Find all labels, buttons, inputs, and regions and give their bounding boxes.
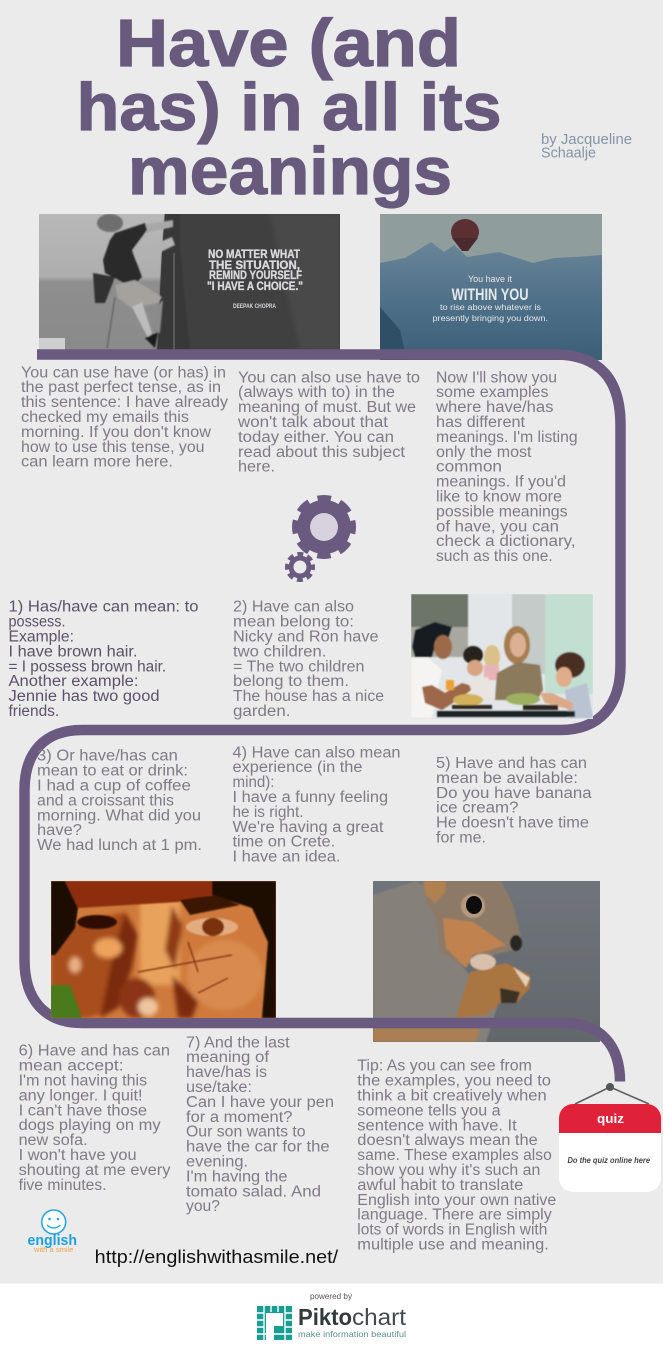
meaning 6: accept: five minutes. [19,1177,107,1194]
paragraph: must: won't talk about that [237,414,389,431]
meaning 5: be available: 5) Have and has can [436,755,587,772]
paragraph: must [237,369,420,476]
meaning 4: experience: I have a funny feeling [232,789,388,806]
meaning 7: use or take: 7) And the last [186,1034,290,1051]
paragraph: other meanings: meanings. I'm listing [436,429,578,446]
meaning 6: accept: any longer. I quit! [19,1087,143,1104]
paragraph: must: read about this subject [238,444,406,461]
quote text [432,274,548,323]
logo: english with a smile: with a smile [33,1247,74,1254]
paragraph: other meanings: Now I'll show you [436,369,557,386]
quote text [207,249,303,310]
meaning 7: use or take: have the car for the [186,1139,330,1156]
photo: family eating [411,594,593,719]
title: Have (and [116,6,461,81]
author byline: by Jacqueline [541,132,632,148]
meaning 6: accept: I'm not having this [19,1072,147,1090]
meaning 7: use or take: I'm having the [186,1168,288,1185]
paragraph: other meanings: some examples [436,384,549,401]
paragraph: other meanings: only the most [436,444,532,461]
meaning 5: be available: Do you have banana [436,785,592,802]
tip paragraph: someone tells you a [357,1102,501,1119]
photo: climber quote [38,213,340,350]
meaning 2: belong to: = The two children [233,658,364,675]
website url: http://englishwithasmile.net/ [95,1246,339,1267]
meaning 3: eat or drink: and a croissant this [37,792,174,809]
meaning 7: use or take: meaning of [186,1049,270,1066]
paragraph: past perfect: You can use have (or has) in [21,364,226,381]
meaning 3: eat or drink: mean to eat or drink: [37,763,188,780]
quote text: You have it [468,274,512,284]
left eye [77,915,117,929]
footer: powered by Piktochart: powered by [310,1292,352,1301]
paragraph: past perfect [21,364,228,471]
meaning 6: accept: dogs playing on my [19,1117,161,1134]
meaning 4: experience: experience (in the [232,759,362,776]
quote text: presently bringing you down. [432,313,548,323]
tip paragraph: the examples, you need to [357,1073,551,1090]
paragraph: other meanings: check a dictionary, [436,533,576,550]
paragraph: past perfect: can learn more here. [21,454,173,471]
meaning 6: accept: new sofa. [19,1132,88,1149]
climber figure [93,214,175,348]
meaning 2: belong to [233,599,384,720]
paragraph: other meanings: like to know more [436,488,562,506]
footer: powered by Piktochart: make information beautiful [298,1329,406,1339]
meaning 1: possess: 1) Has/have can mean: to [8,599,198,616]
title: meanings [128,134,452,209]
right eye [186,918,238,936]
logo: english with a smile: english [28,1232,77,1249]
quote text: "I HAVE A CHOICE." [207,281,303,293]
purple connector line [24,354,620,1082]
squirrel eye [466,896,482,914]
logo: english with a smile [28,1210,77,1254]
icon: gears [287,498,353,580]
squirrel photo [373,881,600,1042]
meaning 4: experience: We're having a great [232,819,384,836]
meaning 5: be available [436,755,592,846]
paragraph: other meanings: where have/has [435,399,554,416]
footer: powered by Piktochart [0,1284,663,1350]
tip paragraph [357,1058,556,1254]
tip paragraph: Tip: As you can see from [357,1058,532,1075]
paragraph: must: today either. You can [238,429,394,446]
paragraph: other meanings [435,369,578,565]
photo: face in shadow [51,881,276,1018]
quote text: THE SITUATION, [209,260,300,272]
meaning 1: possess: Example: [8,628,74,646]
meaning 4: experience: I have an idea. [232,849,340,866]
meaning 7: use or take: Can I have your pen [186,1094,334,1111]
meaning 7: use or take: evening. [186,1154,248,1170]
meaning 6: accept [19,1043,171,1194]
meaning 3: eat or drink: morning. What did you [37,807,201,824]
meaning 6: accept: 6) Have and has can [19,1043,170,1060]
tip paragraph: multiple use and meaning. [357,1236,549,1254]
tip paragraph: think a bit creatively when [357,1088,547,1104]
tip paragraph: lots of words in English with [357,1222,547,1239]
paragraph: past perfect: the past perfect tense, as in [21,379,221,396]
meaning 2: belong to: belong to them. [233,673,349,690]
paragraph: past perfect: morning. If you don't know [21,424,212,441]
meaning 2: belong to: garden. [233,703,290,720]
photo: balloon and mountains [380,214,602,360]
meaning 2: belong to: Nicky and Ron have [233,628,378,646]
paragraph: must: You can also use have to [238,369,420,386]
tip paragraph: language. There are simply [357,1207,552,1224]
paragraph: must: here. [238,459,275,476]
tip paragraph: show you why it's such an [357,1162,540,1179]
meaning 5: be available: for me. [436,830,486,846]
author byline [541,132,632,162]
meaning 4: experience: mind): [232,774,274,791]
paragraph: past perfect: this sentence: I have already [21,394,228,411]
meaning 3: eat or drink: have? [37,822,82,839]
meaning 7: use or take: for a moment? [186,1109,293,1126]
meaning 6: accept: I won't have you [19,1147,137,1164]
meaning 5: be available: He doesn't have time [436,815,589,832]
paragraph: other meanings: has different [436,414,526,431]
quiz hanging sign [559,1083,661,1192]
meaning 5: be available: ice cream? [436,800,519,817]
meaning 3: eat or drink: I had a cup of coffee [37,778,191,794]
meaning 7: use or take [186,1034,334,1215]
title: has) in all its [76,70,502,145]
quote text: NO MATTER WHAT [208,249,300,261]
title [76,6,502,209]
meaning 1: possess: I have brown hair. [8,643,138,660]
meaning 3: eat or drink [37,748,202,854]
quiz hanging sign: quiz [597,1111,625,1126]
quiz hanging sign: Do the quiz online here [568,1156,651,1165]
meaning 6: accept: I can't have those [19,1102,147,1119]
meaning 2: belong to: mean belong to: [233,614,354,631]
balloon [451,219,479,251]
paragraph: other meanings: of have, you can [436,518,559,535]
author byline: Schaalje [541,146,596,162]
meaning 3: eat or drink: We had lunch at 1 pm. [37,837,202,854]
quote text: REMIND YOURSELF [209,270,302,282]
tip paragraph: awful habit to translate [357,1177,523,1194]
paragraph: must: meaning of must. But we [238,399,416,416]
footer: powered by Piktochart: chart [352,1304,407,1330]
paragraph: other meanings: common [436,459,502,476]
meaning 5: be available: mean be available: [436,770,578,787]
meaning 1: possess: Jennie has two good [8,688,160,705]
meaning 7: use or take: you? [186,1198,220,1215]
paragraph: other meanings: such as this one. [436,548,553,565]
meaning 1: possess: friends. [8,703,59,720]
footer: powered by Piktochart: Pikto [298,1304,352,1330]
quote text: DEEPAK CHOPRA [233,304,277,310]
paragraph: past perfect: checked my emails this [21,409,189,426]
meaning 1: possess: possess. [8,614,66,631]
meaning 2: belong to: 2) Have can also [233,599,354,616]
meaning 4: experience [232,744,400,866]
meaning 1: possess [8,599,198,720]
tip paragraph: doesn't always mean the [357,1132,538,1149]
meaning 3: eat or drink: 3) Or have/has can [37,748,178,765]
quote text: to rise above whatever is [440,302,541,312]
tip paragraph: sentence with have. It [357,1117,517,1134]
meaning 7: use or take: use/take: [186,1079,252,1096]
paragraph: other meanings: possible meanings [436,503,568,520]
meaning 2: belong to: two children. [233,643,326,660]
meaning 2: belong to: The house has a nice [233,688,384,705]
meaning 4: experience: time on Crete. [232,834,335,851]
paragraph: other meanings: meanings. If you'd [436,474,566,491]
meaning 7: use or take: have/has is [186,1064,267,1081]
meaning 6: accept: shouting at me every [19,1162,171,1179]
meaning 6: accept: mean accept: [19,1058,124,1075]
meaning 1: possess: = I possess brown hair. [8,658,166,675]
tip paragraph: same. These examples also [357,1147,552,1164]
meaning 1: possess: Another example: [8,673,138,690]
paragraph: past perfect: how to use this tense, you [21,439,204,456]
meaning 7: use or take: tomato salad. And [186,1183,321,1200]
meaning 7: use or take: Our son wants to [186,1124,306,1141]
quote text: WITHIN YOU [452,285,529,304]
meaning 4: experience: 4) Have can also mean [232,744,400,761]
tip paragraph: English into your own native [357,1192,556,1209]
paragraph: must: (always with to) in the [238,384,395,401]
meaning 4: experience: he is right. [232,804,304,821]
